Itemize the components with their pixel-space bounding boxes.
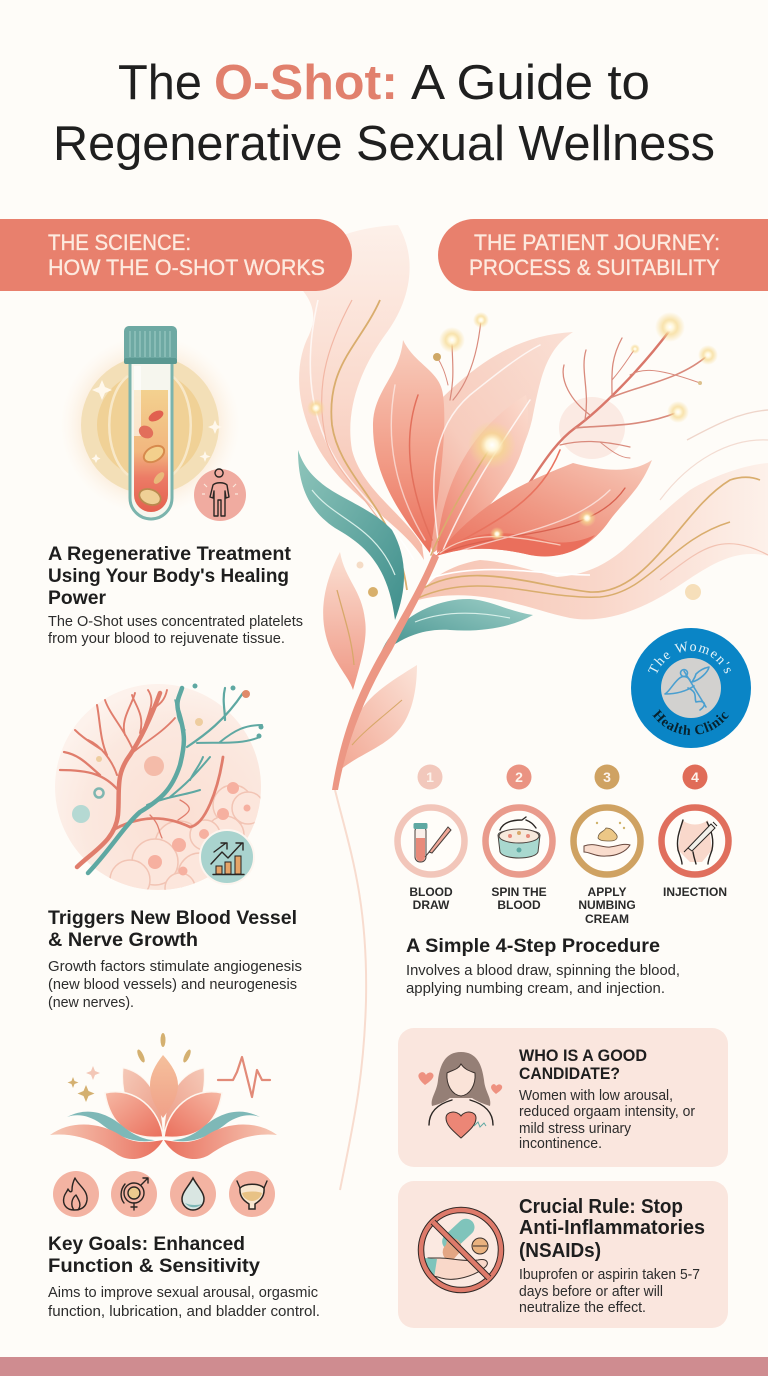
panel text: (NSAIDs) [519,1240,601,1262]
title [53,56,715,171]
text block: vessel growth: Triggers New Blood Vessel [48,907,297,929]
section header: science [0,219,352,291]
pale disc behind branches [559,397,625,459]
text block: key goals: Function & Sensitivity [48,1255,260,1277]
section header: patient journey: THE PATIENT JOURNEY: [474,230,720,255]
faint long stem [335,790,366,1190]
section header: science: THE SCIENCE: [48,230,191,255]
text block: key goals: function, lubrication, and bladder control. [48,1304,320,1320]
step 1: blood draw: 1 [426,769,434,785]
petal: left [373,340,444,553]
panel: NSAID rule [398,1181,728,1328]
step 1: blood draw [398,764,464,912]
icon: gender symbol [111,1171,157,1217]
title line 2: Regenerative Sexual Wellness [53,117,715,171]
text block: regenerative treatment: A Regenerative Treatment [48,543,292,565]
lotus wave and petals, left side [50,1068,163,1159]
step 3: apply numbing cream [574,764,640,926]
icon: tube and syringe [414,823,451,862]
icon: flame [53,1171,99,1217]
panel text: Crucial Rule: Stop [519,1196,683,1218]
text block: 4-step procedure [406,935,680,997]
text block: regenerative treatment: Using Your Body's Healing [48,565,289,587]
stem [332,553,439,790]
text block: 4-step procedure: applying numbing cream, and injection. [406,981,665,997]
step 1: blood draw: DRAW [413,898,450,912]
panel text: CANDIDATE? [519,1065,620,1083]
panel text: mild stress urinary [519,1121,632,1137]
panel text: days before or after will [519,1284,663,1300]
text block: key goals: Key Goals: Enhanced [48,1233,245,1255]
centre petal [150,1055,178,1118]
icon: woman with heart [418,1052,502,1138]
illustration: lotus [50,1033,277,1217]
petal: back centre [417,332,573,553]
text block: vessel growth: Growth factors stimulate angiogenesis [48,959,302,975]
panel text: Women with low arousal, [519,1088,673,1104]
section header: patient journey [438,219,768,291]
teal leaf lower [380,599,533,655]
step 3: apply numbing cream: 3 [603,769,611,785]
panel text: incontinence. [519,1136,602,1152]
step 2: spin the blood [486,764,552,912]
decorative flower illustration [298,225,768,1190]
lotus wave and petals, right side [164,1068,277,1159]
panel text [519,1196,705,1316]
icon: bladder [229,1171,275,1217]
text block: key goals: Aims to improve sexual arousal, orgasmic [48,1285,318,1301]
icon: person badge [194,469,246,521]
pink leaf [323,552,366,690]
text block: 4-step procedure: A Simple 4-Step Procedure [406,935,660,957]
panel text: neutralize the effect. [519,1300,646,1316]
small cell dots [72,684,264,823]
panel: good candidate [398,1028,728,1167]
text block: 4-step procedure: Involves a blood draw, spinning the blood, [406,963,680,979]
text block: regenerative treatment: from your blood to rejuvenate tissue. [48,631,285,647]
petal: right [436,460,652,556]
icon: water drop [170,1171,216,1217]
title line 1: The [118,56,202,110]
step 4: injection: 4 [691,769,699,785]
text block: vessel growth: (new blood vessels) and neurogenesis [48,977,297,993]
bottom band [0,1357,768,1376]
text block: regenerative treatment: Power [48,587,106,609]
clinic badge [631,628,751,748]
step 3: apply numbing cream: CREAM [585,912,629,926]
title line 1: O-Shot: [214,56,398,110]
flowing wave: left [298,225,424,590]
heartbeat line [218,1057,270,1097]
teal leaf upper [298,450,404,620]
badge text top: The Women's [648,642,731,674]
icon: growth chart badge [200,830,254,884]
panel text: Anti-Inflammatories [519,1217,705,1239]
step 4: injection [662,764,728,899]
cell layer [110,782,260,890]
flowing wave: right [418,410,768,619]
petal: coral base bands [436,533,595,556]
text block: vessel growth: & Nerve Growth [48,929,198,951]
text block: vessel growth [48,907,302,1011]
lower leaf [340,665,417,770]
illustration: vessels and nerves [55,684,264,903]
golden glow points [307,312,718,600]
section header: science: HOW THE O-SHOT WORKS [48,255,325,280]
panel text [519,1047,695,1152]
icon: centrifuge [498,817,540,858]
branching vessels [437,320,708,520]
step 3: apply numbing cream: APPLY [588,885,626,899]
title line 1: A Guide to [411,56,650,110]
panel text: WHO IS A GOOD [519,1047,647,1065]
petal: inner centre [437,395,528,553]
text block: regenerative treatment: The O-Shot uses concentrated platelets [48,614,303,630]
gold drops and sparkles [68,1033,192,1102]
step 3: apply numbing cream: NUMBING [578,898,636,912]
badge text bottom: Health Clinic [652,709,729,736]
text block: vessel growth: (new nerves). [48,995,134,1011]
section header: patient journey: PROCESS & SUITABILITY [469,255,720,280]
icon: syringe on abdomen [677,820,717,864]
icon: cream on hand [584,822,630,856]
panel text: Ibuprofen or aspirin taken 5-7 [519,1267,700,1283]
step 2: spin the blood: SPIN THE [491,885,547,899]
caduceus icon [665,667,709,710]
teal vessels [88,688,262,873]
text block: regenerative treatment [48,543,303,647]
step 1: blood draw: BLOOD [409,885,453,899]
icon: test tube with platelets [60,326,246,521]
panel text: reduced orgaam intensity, or [519,1104,695,1120]
red vessels [60,690,223,867]
step 2: spin the blood: BLOOD [497,898,541,912]
icon: no pills [421,1210,501,1290]
petal veins [391,345,625,556]
step 2: spin the blood: 2 [515,769,523,785]
step 4: injection: INJECTION [663,885,727,899]
title line 1 [118,56,650,110]
text block: key goals [48,1233,320,1320]
